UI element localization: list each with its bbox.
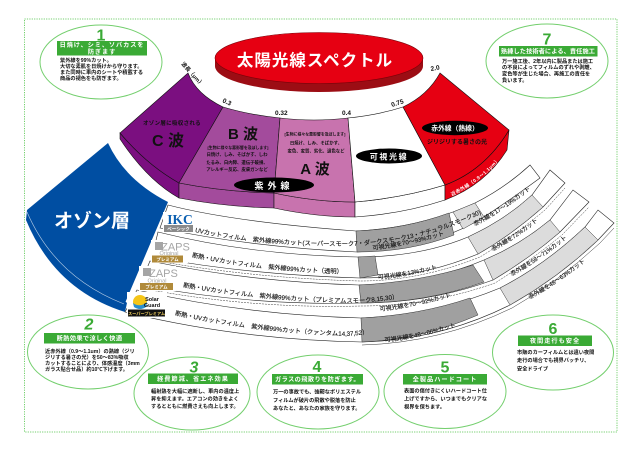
B wave line 2: たるみ、白内障、遺伝子破損、: [206, 159, 268, 166]
number 2: 2: [84, 316, 94, 334]
body 6: [517, 348, 594, 372]
number 1: 1: [97, 28, 106, 44]
UV pill: [234, 178, 314, 192]
infrared cut label 3: 赤外線を58〜71%カット: [510, 236, 566, 276]
ozone layer: [26, 143, 168, 312]
body 5: [404, 386, 488, 410]
body 3: するとともに燃費さえも向上します。: [151, 402, 239, 410]
number 7: 7: [543, 32, 552, 48]
callout 1: 防ぎます: [88, 48, 116, 56]
0.4: 0.4: [342, 110, 351, 117]
callout 4: [257, 355, 379, 429]
0.32: 0.32: [275, 110, 288, 117]
ozone side: [26, 210, 127, 312]
film band 2: [152, 170, 565, 281]
band 2 label: 断熱・UVカットフィルム 紫外線99%カット（透明）: [192, 252, 338, 274]
0.3: 0.3: [221, 97, 233, 108]
body 1: 商品の褪色をも防ぎます。: [60, 74, 122, 82]
visible cut segment: [358, 256, 378, 278]
B wave heading: B 波: [228, 125, 258, 143]
visible cut label 3: 可視光線を70〜92%カット: [380, 293, 450, 312]
body 4: あなたと、あなたの家族を守ります。: [273, 404, 360, 412]
logo: ZAPS premium 2: プレミアム: [145, 284, 168, 290]
B wave line 1: 日焼け、しみ、そばかす、しわ: [206, 151, 268, 158]
visible cut segment: [356, 213, 454, 252]
wavelength labels: [180, 60, 441, 117]
header 4: [272, 374, 363, 384]
body 7: 変色等が生じた場合、再施工の責任を: [502, 70, 590, 78]
body 7: の不良によってフィルムのずれや剥離、: [502, 63, 595, 71]
near infrared label: 近赤外線（0.9〜1.1μm）: [450, 160, 497, 196]
body 1: 紫外線を99%カット。: [60, 56, 112, 64]
A wave heading: A 波: [300, 160, 330, 178]
C wave caption: オゾン層に吸収される: [143, 119, 201, 127]
title plate top: [215, 32, 423, 84]
body 4: [273, 388, 362, 412]
film band 3: [140, 190, 589, 306]
header 2: [44, 333, 135, 344]
number 4: 4: [313, 359, 322, 376]
body 5: 視界を保ちます。: [404, 402, 445, 410]
A wave line 1: 日焼け、しみ、そばかす、: [290, 140, 342, 146]
body 6: 市販のカーフィルムとは違い夜間: [517, 348, 594, 356]
0.75: 0.75: [390, 98, 405, 109]
header 1: [57, 41, 147, 56]
infrared cut label 4: 赤外線を48〜63%カット: [528, 260, 584, 299]
number 6: 6: [549, 321, 558, 338]
body 3: 昇を抑えます。エアコンの効きをよく: [151, 394, 239, 402]
A wave caption: [生物に様々な悪影響を及ぼします]: [285, 132, 346, 136]
body 7: 負います。: [502, 76, 527, 84]
number 5: 5: [441, 360, 450, 376]
body 2: カットすることにより、体感温度（3mm: [45, 359, 140, 367]
body 2: ジリする暑さの光）を50〜83%吸収: [45, 353, 129, 361]
ozone label: オゾン層: [54, 210, 130, 232]
B wave labels: [206, 125, 269, 173]
infrared cut segment: [453, 203, 484, 229]
callout 7: 熟練した技術者による、責任施工: [501, 48, 595, 56]
visible light segment: [348, 107, 445, 202]
logo: Solar Guard super premium: Solar: [145, 297, 160, 303]
band side shadow: [152, 188, 565, 281]
body 6: 走行の場合でも視界バッチリ、: [517, 356, 589, 364]
logo: ZAPS premium 1: プレミアム: [156, 256, 179, 263]
logo: ZAPS premium 2: ZAPS: [149, 268, 178, 280]
A wave line 2: 変色、変質、劣化、退色など: [287, 148, 345, 154]
B wave segment: [179, 107, 280, 193]
ozone face: [27, 143, 168, 303]
callout 1: [40, 25, 162, 99]
film band 4: [125, 210, 614, 345]
title plate side: [215, 58, 423, 92]
number 3: 3: [190, 360, 199, 376]
callout 1: 日焼け、シミ、ソバカスを: [60, 41, 144, 49]
infrared caption: ジリジリする暑さの光: [427, 138, 487, 146]
infrared cut label 2: 赤外線を72%カット: [492, 220, 536, 251]
band side shadow: [362, 228, 614, 345]
A wave segment: [274, 118, 355, 202]
callout 5: [384, 354, 506, 428]
callout 3: [134, 357, 250, 430]
callout 4: ガラスの飛散りを防ぎます。: [275, 376, 360, 384]
ozone rim: [27, 212, 124, 304]
purple side: C wave: [120, 133, 179, 198]
logo: ZAPS premium 1: Original: [160, 251, 178, 257]
band 3 label: 断熱・UVカットフィルム 紫外線99%カット（プレミアムスモーク8,15,30）: [183, 282, 394, 304]
C wave heading: C 波: [152, 132, 184, 150]
visible light side: [355, 185, 445, 217]
C wave segment: [120, 73, 223, 183]
B wave caption: [生物に様々な悪影響を及ぼします]: [208, 145, 269, 150]
body 7: 万一施工後、2年以内に製品または施工: [502, 57, 593, 65]
band side shadow: [140, 207, 589, 306]
header 7: [499, 46, 598, 56]
logo: ZAPS premium 2: Original: [148, 278, 166, 284]
callout 6: 夜間走行も安全: [530, 337, 580, 345]
body 5: 上げですから、いつまでもクリアな: [404, 394, 487, 402]
body 1: 大切な素肌を日焼けから守ります。: [60, 62, 142, 70]
body 5: 表面の傷付きにくいハードコート仕: [404, 386, 488, 394]
infrared side: [445, 130, 509, 200]
band 4 label: 断熱・UVカットフィルム 紫外線99%カット（クァンタム14,37,52）: [175, 310, 364, 337]
infrared cut label 1: 赤外線を17〜19%カット: [474, 188, 529, 226]
body 4: 万一の事故でも、強靭なポリエステル: [273, 388, 362, 396]
title: 太陽光線スペクトル: [237, 51, 393, 70]
header 6: [518, 336, 592, 346]
infrared segment: [403, 73, 509, 185]
header 3: [148, 374, 238, 384]
callout 2: [28, 315, 148, 389]
visible cut segment: [361, 298, 478, 342]
body 6: 安全ドライブ: [517, 364, 549, 372]
body 7: [502, 57, 595, 84]
callout 2: 断熱効果で涼しく快適: [57, 334, 123, 342]
logo: ZAPS premium 1: ZAPS: [161, 242, 190, 254]
title plate: [215, 32, 423, 92]
body 4: フィルムが破片の飛散や脱落を防止: [273, 396, 356, 404]
logo: Solar Guard super premium: スーパープレミアム: [128, 310, 165, 317]
body 2: ガラス貼合せ品）約10℃下げます。: [45, 365, 128, 373]
spectrum fan: [120, 73, 509, 217]
UV pill: 紫外線: [254, 180, 294, 191]
body 3: [151, 387, 239, 410]
infrared cut segment: [468, 195, 543, 254]
film labels: [175, 188, 584, 342]
logo: IKC basic: [163, 212, 195, 233]
A wave side: [274, 193, 355, 217]
logo: IKC basic: IKC: [167, 212, 193, 227]
body 3: 輻射熱を大幅に遮断し、車内の温度上: [151, 387, 239, 395]
callout 7: [486, 24, 608, 98]
logo: ZAPS premium 2: [139, 266, 178, 291]
band 1 label: UVカットフィルム 紫外線99%カット(スーパースモーク7・ダークスモーク13・ナチュラルスモーク30): [196, 210, 481, 246]
visible cut label 1: 可視光線を70〜93%カット: [372, 232, 443, 250]
visible cut label 2: 可視光線を13%カット: [378, 265, 436, 280]
wavelength unit: 波長（μm）: [180, 60, 206, 88]
C wave labels: [143, 119, 201, 150]
visible light pill: 可視光線: [370, 152, 408, 162]
logo: Solar Guard super premium: [127, 292, 167, 318]
logo: ZAPS premium 1: [151, 240, 190, 263]
A wave labels: [285, 132, 346, 178]
film band 1: [160, 165, 540, 252]
body 1: [60, 56, 143, 82]
callout 6: [492, 315, 614, 390]
body 1: また同時に車内のシートや積載する: [60, 68, 143, 76]
logo: Solar Guard super premium: Guard: [144, 303, 160, 309]
visible light pill: [356, 148, 422, 164]
2.0: 2.0: [430, 64, 441, 73]
body 2: 近赤外線（0.9〜1.1um）の熱線（ジリ: [45, 347, 135, 355]
callout 3: 経費節減、省エネ効果: [157, 375, 229, 383]
header 5: [403, 374, 487, 384]
B wave side: [179, 183, 274, 208]
infrared pill: [422, 121, 488, 135]
visible cut label 4: 可視光線を48〜86%カット: [384, 323, 455, 342]
visible cut segment: [359, 265, 484, 303]
B wave line 3: アレルギー反応、皮膚ガンなど: [206, 166, 268, 173]
body 2: [45, 347, 140, 373]
infrared cut segment: [500, 227, 598, 305]
logo: IKC basic: ベーシック: [167, 226, 190, 232]
infrared cut segment: [484, 220, 560, 280]
callout 5: 全製品ハードコート: [413, 376, 477, 384]
infrared pill: 赤外線（熱線）: [431, 124, 479, 132]
